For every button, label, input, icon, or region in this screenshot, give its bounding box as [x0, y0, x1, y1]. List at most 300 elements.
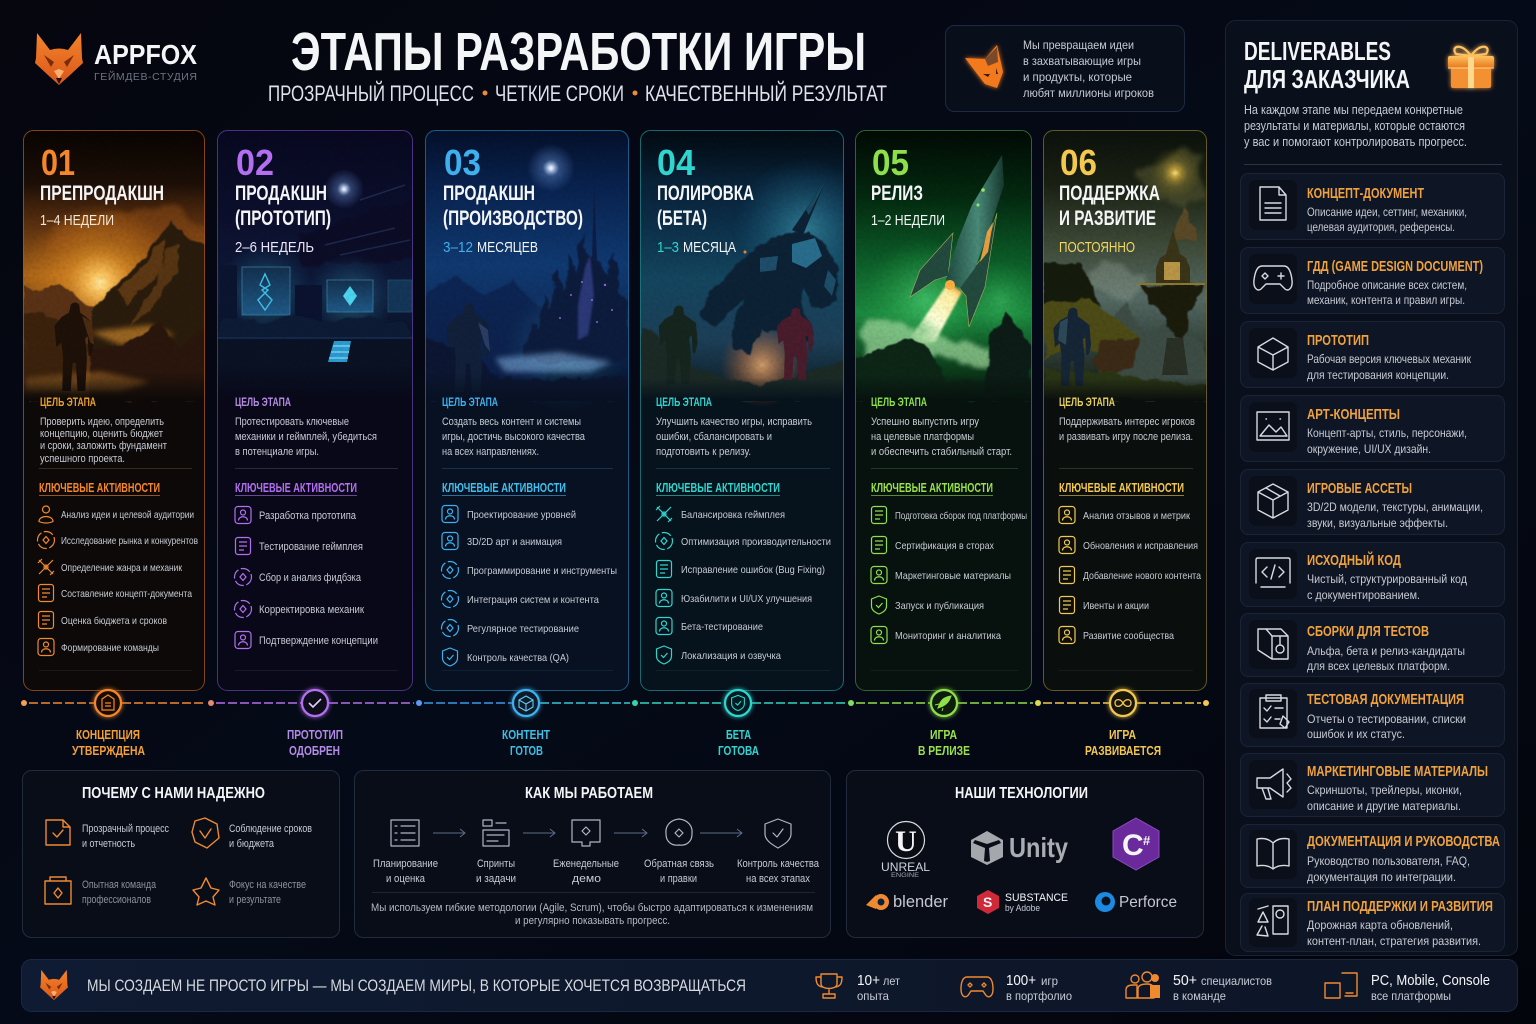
activity: budget estimate — [38, 612, 167, 628]
node label: ГОТОВ — [510, 743, 543, 758]
stage number: 02 — [236, 142, 274, 183]
deliverable: marketing materials: Скриншоты, трейлеры, иконки, — [1307, 783, 1462, 797]
stage heading: ПРЕПРОДАКШН — [40, 182, 164, 205]
logo: Perforce: Perforce — [1119, 894, 1177, 911]
workflow step: quality control: на всех этапах — [746, 873, 810, 885]
arrow — [614, 829, 647, 837]
logo: C sharp — [1113, 818, 1159, 870]
mission text: в захватывающие игры — [1023, 54, 1141, 68]
activity: beta testing — [656, 618, 763, 634]
deliverable: source code: Чистый, структурированный код — [1307, 572, 1467, 586]
icon: screen — [572, 820, 600, 846]
logo: Substance by Adobe: S — [983, 894, 992, 910]
brand tagline: ГЕЙМДЕВ-СТУДИЯ — [94, 70, 197, 83]
reason: experienced team: профессионалов — [82, 894, 151, 906]
key activities heading — [656, 480, 780, 496]
reason: experienced team: Опытная команда — [82, 879, 157, 891]
node label: КОНТЕНТ — [502, 727, 550, 742]
stage duration — [657, 239, 736, 256]
deliverable: marketing materials — [1240, 754, 1504, 816]
logo: Blender: blender — [893, 892, 948, 911]
node icon: shield — [725, 690, 751, 716]
stat: games in portfolio: игр — [1041, 974, 1058, 988]
icon: fox — [40, 970, 68, 1000]
stage goal: на всех направлениях. — [442, 446, 539, 458]
node icon: cube — [513, 690, 539, 716]
activity: feedback — [234, 568, 362, 586]
stage number: 04 — [657, 142, 695, 183]
activity: gameplay testing: Тестирование геймплея — [259, 541, 363, 553]
deliverable: test documentation: ТЕСТОВАЯ ДОКУМЕНТАЦИЯ — [1307, 691, 1464, 708]
stage goal: ошибки, сбалансировать и — [656, 431, 772, 443]
activity: art and animation — [442, 532, 562, 550]
activity: optimization — [656, 532, 831, 550]
stage goal: и обеспечить стабильный старт. — [871, 446, 1012, 458]
activity: optimization: Оптимизация производительности — [681, 536, 831, 548]
activity: QA: Контроль качества (QA) — [467, 652, 569, 664]
deliverable: game design document — [1240, 248, 1504, 314]
stage goal: Улучшить качество игры, исправить — [656, 416, 812, 428]
panel heading: DELIVERABLES — [1244, 36, 1391, 66]
banner slogan: МЫ СОЗДАЕМ НЕ ПРОСТО ИГРЫ — МЫ СОЗДАЕМ МИРЫ, В КОТОРЫЕ ХОЧЕТСЯ ВОЗВРАЩАТЬСЯ — [87, 976, 746, 995]
activity: level design — [442, 506, 576, 522]
icon: sprint board — [483, 820, 509, 846]
reason: transparent process: Прозрачный процесс — [82, 823, 169, 835]
workflow step: quality control — [737, 819, 820, 885]
node label: В РЕЛИЗЕ — [918, 743, 970, 758]
stage heading: РЕЛИЗ — [871, 182, 923, 205]
panel: how we work — [354, 770, 830, 938]
icon: document — [1260, 187, 1286, 220]
stage heading: ПРОДАКШН — [235, 182, 327, 205]
activity: prototype development — [235, 506, 357, 524]
activity: audience analysis — [39, 506, 194, 523]
key activities heading — [39, 480, 160, 496]
stage duration: 3–12 — [443, 239, 473, 256]
activity: events — [1060, 596, 1149, 614]
stage number: 05 — [872, 142, 909, 183]
workflow step: sprints: Спринты — [477, 858, 515, 870]
illustration: floating island and explorer — [1043, 130, 1207, 401]
activity: prototype development: Разработка прототипа — [259, 510, 357, 522]
activity: audience analysis: Анализ идеи и целевой аудитории — [61, 509, 194, 521]
stat: years of experience: лет — [883, 974, 900, 988]
timeline with milestones — [21, 690, 1209, 758]
methodology note: Мы используем гибкие методологии (Agile, Scrum), чтобы быстро адаптироваться к изменениям — [371, 902, 813, 914]
logo: Unreal Engine — [881, 822, 930, 879]
activity: platform builds — [872, 506, 1027, 524]
illustration: night castle and explorer — [425, 130, 629, 412]
activity: launch: Запуск и публикация — [895, 600, 984, 612]
reason: deadlines and budget — [192, 818, 312, 850]
activity: level design: Проектирование уровней — [467, 509, 576, 521]
stage goal — [235, 395, 377, 458]
deliverable: art concepts: Концепт-арты, стиль, персонажи, — [1307, 426, 1467, 440]
milestone: content ready — [502, 690, 550, 758]
logo: Unity — [971, 831, 1068, 865]
stage duration: 2–6 НЕДЕЛЬ — [235, 239, 314, 256]
activity: reviews and metrics: Анализ отзывов и метрик — [1083, 510, 1190, 522]
deliverable: test builds — [1240, 614, 1504, 676]
activity: concept document: Составление концепт-документа — [61, 588, 192, 600]
milestone: prototype approved — [287, 690, 343, 758]
deliverable: support and development plan: Дорожная карта обновлений, — [1307, 918, 1453, 932]
icon: picture — [1257, 412, 1289, 440]
activity: localization — [656, 646, 781, 664]
stat: years of experience: 10+ — [857, 972, 880, 989]
panel description: у вас и помогают контролировать прогресс. — [1244, 135, 1467, 149]
reason: transparent process — [46, 820, 169, 850]
deliverable: source code — [1240, 542, 1504, 606]
node icon: rocket — [931, 690, 957, 716]
stage duration: МЕСЯЦЕВ — [477, 239, 538, 256]
stage heading: ПРОДАКШН — [443, 182, 535, 205]
logo: C sharp: # — [1143, 833, 1151, 848]
stage goal — [656, 395, 812, 458]
key activities heading — [871, 480, 993, 496]
stage goal — [442, 395, 586, 458]
stage goal: ЦЕЛЬ ЭТАПА — [656, 395, 712, 409]
activity: gameplay testing — [236, 538, 363, 554]
deliverable: test documentation: Отчеты о тестировании, списки — [1307, 712, 1466, 726]
activity: concept approval — [235, 632, 378, 648]
stage goal: и сроки, заложить фундамент — [40, 440, 167, 452]
panel: stage 02 prototype — [217, 130, 413, 691]
stat: specialists: в команде — [1173, 989, 1226, 1003]
activity: feedback: Сбор и анализ фидбэка — [259, 572, 362, 584]
key activities heading: КЛЮЧЕВЫЕ АКТИВНОСТИ — [871, 480, 993, 495]
stat: games in portfolio: 100+ — [1006, 972, 1036, 989]
callout: studio mission — [946, 26, 1184, 112]
stage goal: Создать весь контент и системы — [442, 416, 581, 428]
key activities heading: КЛЮЧЕВЫЕ АКТИВНОСТИ — [235, 480, 357, 495]
activity: new content: Добавление нового контента — [1083, 570, 1201, 582]
stage duration: 1–2 НЕДЕЛИ — [871, 212, 945, 229]
stage goal — [40, 395, 167, 465]
node icon: concept — [95, 690, 121, 716]
workflow step: feedback — [644, 819, 714, 885]
activity: bug fixing: Исправление ошибок (Bug Fixing) — [681, 564, 825, 576]
stage goal: Успешно выпустить игру — [871, 416, 979, 428]
activity: mechanics adjustment: Корректировка механик — [259, 604, 364, 616]
node label — [918, 727, 970, 758]
stage heading: (БЕТА) — [657, 207, 707, 230]
reason: quality focus: Фокус на качестве — [229, 879, 306, 891]
stat: platforms: все платформы — [1371, 989, 1451, 1003]
stage duration: ПОСТОЯННО — [1059, 239, 1135, 256]
stat: years of experience: опыта — [857, 989, 889, 1003]
activity: marketing materials — [871, 566, 1011, 584]
illustration: mech and two soldiers — [640, 131, 844, 405]
activity: marketing materials: Маркетинговые материалы — [895, 570, 1011, 582]
stage goal: концепцию, оценить бюджет — [40, 428, 163, 440]
stat: specialists: 50+ — [1173, 972, 1197, 989]
stage goal: успешного проекта. — [40, 453, 125, 465]
deliverable: test builds: Альфа, бета и релиз-кандидаты — [1307, 644, 1465, 658]
panel: stage 06 support — [1043, 130, 1207, 691]
stat: platforms — [1325, 972, 1490, 1003]
deliverable: game design document: механик, контента и правил игры. — [1307, 293, 1465, 307]
logo: Substance by Adobe: SUBSTANCE — [1005, 892, 1068, 904]
deliverable: test builds: для всех целевых платформ. — [1307, 659, 1450, 673]
node label: ИГРА — [1109, 727, 1136, 742]
activity: store certification — [872, 536, 995, 554]
workflow step: feedback: и правки — [660, 873, 697, 885]
stage heading: (ПРОИЗВОДСТВО) — [443, 207, 583, 230]
stage duration: 1–3 — [657, 239, 679, 256]
stat: specialists — [1126, 972, 1272, 1003]
stage goal: Протестировать ключевые — [235, 416, 349, 428]
stage goal: на целевые платформы — [871, 431, 974, 443]
logo: C sharp: C — [1122, 829, 1144, 862]
deliverable: art concepts — [1240, 396, 1504, 462]
panel: stage 01 preproduction — [20, 130, 210, 691]
deliverable: documentation and guides — [1240, 824, 1504, 888]
deliverable: art concepts: АРТ-КОНЦЕПТЫ — [1307, 406, 1400, 423]
node label — [1085, 727, 1161, 758]
mission text: и продукты, которые — [1023, 70, 1132, 84]
key activities heading — [442, 480, 566, 496]
node label — [72, 727, 145, 758]
stage goal: Проверить идею, определить — [40, 416, 164, 428]
icon: star — [193, 878, 219, 905]
deliverable: game assets: ИГРОВЫЕ АССЕТЫ — [1307, 480, 1412, 497]
icon: clipboard — [45, 877, 71, 904]
activity: platform builds: Подготовка сборок под платформы — [895, 510, 1027, 522]
stage goal: подготовить к релизу. — [656, 446, 751, 458]
title: ЭТАПЫ РАЗРАБОТКИ ИГРЫ — [291, 22, 866, 82]
stage goal: и развивать игру после релиза. — [1059, 431, 1193, 443]
logo: Perforce — [1095, 892, 1177, 912]
key activities heading: КЛЮЧЕВЫЕ АКТИВНОСТИ — [39, 480, 160, 495]
deliverable: game assets: 3D/2D модели, текстуры, анимации, — [1307, 500, 1483, 514]
activity: programming: Программирование и инструменты — [467, 565, 617, 577]
activity: community — [1059, 626, 1174, 644]
deliverable: concept document — [1240, 174, 1504, 240]
node label: ОДОБРЕН — [289, 743, 340, 758]
activity: launch — [872, 596, 984, 614]
activity: QA — [442, 648, 569, 666]
arrow — [700, 829, 742, 837]
icon: open book — [1257, 838, 1289, 869]
deliverable: prototype: ПРОТОТИП — [1307, 332, 1369, 349]
panel: stage 05 release — [855, 130, 1040, 691]
stage duration: МЕСЯЦА — [683, 239, 736, 256]
icon: code screen — [1256, 558, 1290, 587]
deliverable: prototype: Рабочая версия ключевых механик — [1307, 352, 1472, 366]
workflow step: demo — [553, 820, 619, 885]
bottom banner — [22, 960, 1518, 1012]
arrow — [433, 829, 465, 837]
workflow step: sprints — [476, 820, 516, 885]
node icon: infinity — [1110, 690, 1136, 716]
mission text: любят миллионы игроков — [1023, 86, 1154, 100]
activity list — [442, 506, 617, 666]
icon: gamepad — [961, 977, 993, 997]
deliverable: prototype — [1240, 322, 1504, 388]
panel: our technologies — [846, 770, 1204, 938]
subtitle: КАЧЕСТВЕННЫЙ РЕЗУЛЬТАТ — [645, 81, 887, 106]
logo: Blender — [866, 892, 948, 911]
activity: concept approval: Подтверждение концепции — [259, 635, 378, 647]
panel: stage 04 polish beta — [640, 130, 844, 691]
milestone: concept approved — [72, 690, 145, 758]
stage heading: (ПРОТОТИП) — [235, 207, 331, 230]
panel heading: ДЛЯ ЗАКАЗЧИКА — [1244, 64, 1410, 94]
activity: mechanics adjustment — [234, 600, 364, 618]
activity: concept document — [38, 584, 192, 602]
milestone: game evolves — [1085, 690, 1161, 758]
icon: fox head logo — [35, 33, 83, 85]
key activities heading: КЛЮЧЕВЫЕ АКТИВНОСТИ — [1059, 480, 1184, 495]
key activities heading — [1059, 480, 1184, 496]
stage heading — [657, 182, 754, 230]
activity: events: Ивенты и акции — [1083, 600, 1149, 612]
stage heading: ПОДДЕРЖКА — [1059, 182, 1160, 205]
logo: Substance by Adobe — [977, 890, 1068, 914]
activity: programming — [442, 562, 617, 578]
mission text — [1023, 38, 1154, 100]
stage goal: ЦЕЛЬ ЭТАПА — [235, 395, 291, 409]
reason: deadlines and budget: и бюджета — [229, 838, 275, 850]
mission text: Мы превращаем идеи — [1023, 38, 1134, 52]
stat: platforms: PC, Mobile, Console — [1371, 972, 1490, 989]
deliverable: test documentation: ошибок и их статус. — [1307, 727, 1405, 741]
icon: build box — [1258, 629, 1288, 659]
activity: community: Развитие сообщества — [1083, 630, 1174, 642]
deliverable: concept document: КОНЦЕПТ-ДОКУМЕНТ — [1307, 185, 1424, 202]
subtitle: ПРОЗРАЧНЫЙ ПРОЦЕСС — [268, 81, 474, 106]
stage goal: ЦЕЛЬ ЭТАПА — [1059, 395, 1115, 409]
stat: games in portfolio: в портфолио — [1006, 989, 1072, 1003]
activity: localization: Локализация и озвучка — [681, 650, 781, 662]
workflow step: demo: Еженедельные — [553, 858, 619, 870]
stage goal: ЦЕЛЬ ЭТАПА — [40, 395, 96, 409]
icon: clipboard checklist — [1260, 695, 1289, 728]
stage heading — [443, 182, 583, 230]
activity: art and animation: 3D/2D арт и анимация — [467, 536, 562, 548]
panel heading: КАК МЫ РАБОТАЕМ — [525, 785, 653, 802]
icon: shield — [765, 819, 791, 848]
stage number: 01 — [41, 142, 75, 183]
activity list — [871, 506, 1027, 644]
key activities heading — [235, 480, 357, 496]
deliverable: concept document: Описание идеи, сеттинг, механики, — [1307, 205, 1467, 219]
deliverable: test documentation — [1240, 684, 1504, 746]
panel: why reliable — [22, 770, 340, 938]
icon: document check — [46, 820, 70, 845]
stage goal — [871, 395, 1012, 458]
panel description — [1244, 103, 1467, 149]
node label: КОНЦЕПЦИЯ — [76, 727, 140, 742]
activity list — [38, 506, 198, 656]
workflow step: planning — [373, 820, 438, 885]
key activities heading: КЛЮЧЕВЫЕ АКТИВНОСТИ — [442, 480, 566, 495]
activity: regular testing: Регулярное тестирование — [467, 623, 579, 635]
stage goal: механики и геймплей, убедиться — [235, 431, 377, 443]
panel description: На каждом этапе мы передаем конкретные — [1244, 103, 1463, 117]
reason: experienced team — [45, 877, 157, 906]
icon: fox profile — [965, 45, 1003, 88]
stage number: 06 — [1060, 142, 1097, 183]
logo: Unreal Engine: U — [895, 825, 917, 858]
workflow step: feedback: Обратная связь — [644, 858, 714, 870]
key activities heading: КЛЮЧЕВЫЕ АКТИВНОСТИ — [656, 480, 780, 495]
subtitle — [268, 81, 887, 106]
activity: market research — [38, 532, 198, 548]
icon: people — [1126, 972, 1154, 998]
activity: updates and fixes — [1059, 536, 1198, 554]
icon: roadmap — [1257, 906, 1288, 936]
node icon: check — [302, 690, 328, 716]
deliverable: game assets — [1240, 470, 1504, 534]
activity: monitoring: Мониторинг и аналитика — [895, 630, 1001, 642]
activity: budget estimate: Оценка бюджета и сроков — [61, 615, 167, 627]
stage number: 03 — [444, 142, 481, 183]
activity: beta testing: Бета-тестирование — [681, 621, 763, 633]
activity: team forming: Формирование команды — [61, 642, 159, 654]
illustration: rocket launch — [855, 130, 1040, 401]
activity: monitoring — [871, 626, 1001, 644]
panel heading — [1244, 36, 1410, 94]
deliverable: documentation and guides: документация по интеграции. — [1307, 870, 1456, 884]
panel heading: ПОЧЕМУ С НАМИ НАДЕЖНО — [82, 785, 265, 802]
stat: specialists: специалистов — [1201, 974, 1272, 988]
icon: trophy — [816, 974, 842, 998]
reason: quality focus: и результате — [229, 894, 281, 906]
workflow step: planning: и оценка — [386, 873, 426, 885]
activity list — [234, 506, 378, 648]
activity: balancing: Балансировка геймплея — [681, 509, 785, 521]
node label: УТВЕРЖДЕНА — [72, 743, 145, 758]
stage goal: ЦЕЛЬ ЭТАПА — [442, 395, 498, 409]
stage heading — [235, 182, 331, 230]
activity: integration — [442, 590, 599, 608]
deliverable: test builds: СБОРКИ ДЛЯ ТЕСТОВ — [1307, 623, 1429, 640]
activity: genre definition: Определение жанра и механик — [61, 562, 182, 574]
stage goal — [1059, 395, 1195, 443]
logo: Unreal Engine: UNREAL — [881, 860, 930, 874]
deliverable: game assets: звуки, визуальные эффекты. — [1307, 516, 1448, 530]
activity: store certification: Сертификация в сторах — [895, 540, 995, 552]
activity: integration: Интеграция систем и контента — [467, 594, 599, 606]
node label — [718, 727, 759, 758]
icon: checklist — [391, 820, 419, 846]
node label: ГОТОВА — [718, 743, 759, 758]
logo: Substance by Adobe: by Adobe — [1005, 903, 1040, 913]
subtitle: ЧЕТКИЕ СРОКИ — [495, 81, 624, 106]
icon: megaphone — [1257, 769, 1291, 799]
node label — [502, 727, 550, 758]
reason: quality focus — [193, 878, 306, 906]
node label: ИГРА — [930, 727, 957, 742]
methodology note: и регулярно показывать прогресс. — [515, 915, 670, 927]
icon: glowing gift — [1448, 47, 1494, 88]
reason: transparent process: и отчетность — [82, 838, 135, 850]
logo: Unity: Unity — [1009, 832, 1068, 863]
stage duration — [443, 239, 538, 256]
illustration: sunset mountains and explorer — [23, 160, 205, 404]
workflow step: quality control: Контроль качества — [737, 858, 820, 870]
node label: РАЗВИВАЕТСЯ — [1085, 743, 1161, 758]
stage heading: И РАЗВИТИЕ — [1059, 207, 1156, 230]
milestone: beta ready — [718, 690, 759, 758]
deliverable: game design document: Подробное описание всех систем, — [1307, 278, 1467, 292]
deliverable: source code: ИСХОДНЫЙ КОД — [1307, 551, 1401, 569]
activity: reviews and metrics — [1059, 506, 1190, 524]
stat: games in portfolio — [961, 972, 1072, 1003]
deliverable: marketing materials: описание и другие материалы. — [1307, 799, 1461, 813]
